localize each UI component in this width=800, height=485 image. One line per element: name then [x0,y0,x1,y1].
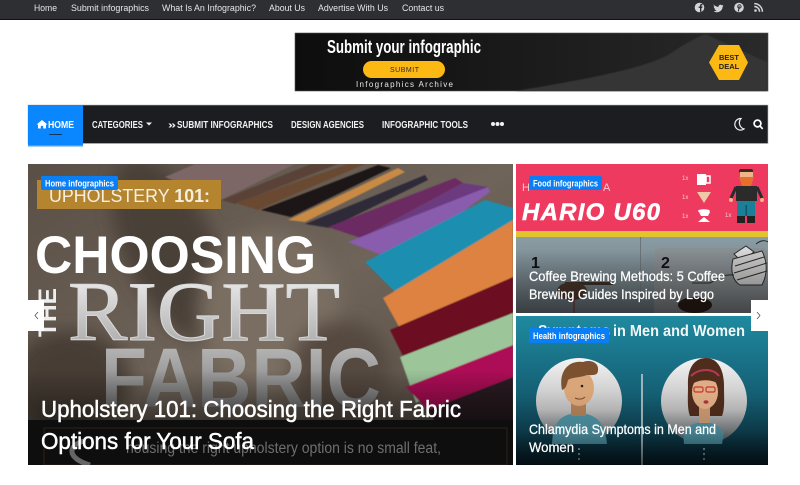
panel: coffee article [516,164,768,318]
main menu links: SUBMIT INFOGRAPHICS [177,119,273,131]
brewing steps: 2 [661,255,670,272]
home tab [28,105,83,146]
category badge: Health infographics [533,331,605,341]
equipment icons: 1x [682,195,688,201]
poster heading: HARIO U60 [522,199,661,226]
search icon [754,120,763,129]
artwork title: right: RIGHT [68,265,340,359]
equipment icons: 1x [725,213,731,219]
article title: Chlamydia Symptoms in Men and [529,421,716,437]
best deal badge: DEAL [719,62,740,71]
gold heading strip: UPHOLSTERY 101: [49,185,210,206]
artwork title: fabric: FABRIC [101,331,381,425]
home tab: HOME [48,120,74,131]
poster heading [522,184,660,220]
black intro text band: housing the right upholstery option is no small feat, [126,440,441,457]
gold heading strip [37,180,221,209]
dotted connectors [578,448,705,460]
dark mode icon [735,118,744,130]
article title: Coffee Brewing Methods: 5 Coffee [529,268,725,284]
poster heading: H [522,182,530,194]
equipment icons [682,174,731,222]
article title: Upholstery 101: Choosing the Right Fabric [41,396,461,422]
top menu links: Submit infographics [71,3,149,13]
main menu links: CATEGORIES [92,119,143,131]
panel: featured upholstery article [28,164,513,465]
poster heading: in Men and Women [613,323,745,340]
banner advertisement [295,33,768,91]
brewing steps [531,237,768,318]
main menu links: INFOGRAPHIC TOOLS [382,119,468,131]
top navigation bar [0,0,800,20]
category badge: Food infographics [533,178,598,188]
top menu links: About Us [269,3,305,13]
woman illustration [661,358,747,444]
banner mountain artwork [515,34,767,91]
center divider [641,374,643,465]
article title [528,424,716,452]
kettle illustration [692,241,768,285]
category badge [529,176,602,190]
next slide arrow [751,300,768,331]
man illustration [536,358,622,444]
fabric swatches [165,164,513,430]
social icons [695,3,762,12]
banner heading: Submit your infographic [327,37,481,57]
article title [529,268,725,302]
top menu links: Contact us [402,3,444,13]
sofa fabric folds [28,164,390,420]
pink poster header [516,164,768,231]
poster heading: Symptoms [538,323,610,340]
dark gradient overlay [28,370,513,420]
best deal badge: BEST [719,53,739,62]
best deal badge [709,45,748,80]
main menu links: » [168,119,176,131]
category badge [529,328,609,343]
equipment icons: 1x [682,214,688,220]
artwork title: the: THE [34,288,62,337]
top menu links: What Is An Infographic? [162,3,256,13]
article title: Brewing Guides Inspired by Lego [529,286,714,302]
artwork title: choosing: CHOOSING [35,226,316,285]
submit button: SUBMIT [390,67,420,74]
article title: Women [529,439,574,455]
previous slide arrow [28,300,44,331]
lego barista figure [729,169,764,223]
equipment icons: 1x [682,176,688,182]
dark gradient overlay [516,406,768,465]
dark gradient overlay [516,250,768,313]
top menu links [34,3,444,13]
yellow stripe [516,231,768,237]
top menu links: Home [34,3,57,13]
submit button [363,61,445,78]
banner caption: Infographics Archive [356,80,454,89]
poster heading [538,324,744,336]
brewing steps: 1 [531,255,540,272]
category badge [41,176,118,190]
poster heading: A [603,182,611,194]
main menu links [92,119,504,131]
main navigation bar [28,105,768,146]
black intro text band [28,420,513,465]
category badge: Home infographics [45,178,114,188]
article title: Options for Your Sofa [41,428,255,454]
article title [41,396,461,454]
panel: chlamydia article [516,316,768,465]
main menu links: DESIGN AGENCIES [291,119,364,131]
top menu links: Advertise With Us [318,3,388,13]
